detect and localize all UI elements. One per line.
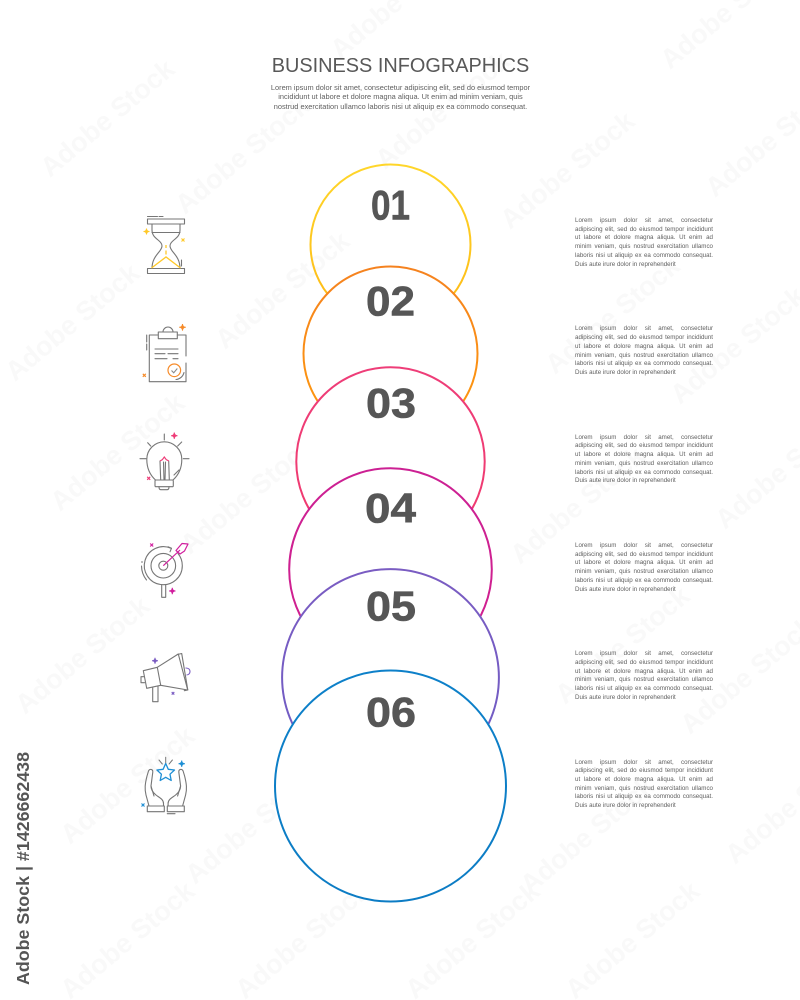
intro text xyxy=(271,83,530,111)
text block 03: minim veniam, quis nostrud exercitation ullamco xyxy=(575,460,713,467)
text block 04: adipiscing elit, sed do eiusmod tempor incididunt xyxy=(575,551,713,558)
icon: clipboard checklist xyxy=(143,324,186,382)
watermark pattern: Adobe Stock xyxy=(55,720,201,850)
intro text: Lorem ipsum dolor sit amet, consectetur adipiscing elit, sed do eiusmod tempor xyxy=(271,83,530,92)
text block 05: minim veniam, quis nostrud exercitation ullamco xyxy=(575,676,713,683)
number 05: 05 xyxy=(366,582,416,630)
watermark pattern: Adobe Stock xyxy=(540,250,686,380)
number 03: 03 xyxy=(366,380,416,426)
intro text: incididunt ut labore et dolore magna aliqua. Ut enim ad minim veniam, quis xyxy=(278,92,523,101)
watermark pattern: Adobe Stock xyxy=(35,53,181,183)
number 04: 04 xyxy=(365,484,417,532)
stock id vertical label: Adobe Stock | #1426662438 xyxy=(13,752,33,985)
watermark pattern: Adobe Stock xyxy=(210,225,356,355)
watermark pattern: Adobe Stock xyxy=(515,770,661,900)
icon: hourglass xyxy=(144,216,184,274)
icon: hands holding star xyxy=(142,757,186,814)
text block 06: Lorem ipsum dolor sit amet, consectetur xyxy=(575,759,713,766)
watermark pattern: Adobe Stock xyxy=(45,387,191,517)
text block 05: adipiscing elit, sed do eiusmod tempor incididunt xyxy=(575,659,713,666)
watermark pattern: Adobe Stock xyxy=(370,45,516,175)
icon: megaphone xyxy=(141,654,190,702)
text block 03: Lorem ipsum dolor sit amet, consectetur xyxy=(575,434,713,441)
circle 01 xyxy=(310,164,470,324)
title: BUSINESS INFOGRAPHICS xyxy=(272,55,529,77)
text block 02: Lorem ipsum dolor sit amet, consectetur xyxy=(575,325,713,332)
circle 03 xyxy=(296,367,485,556)
watermark pattern: Adobe Stock xyxy=(0,257,146,387)
watermark pattern: Adobe Stock xyxy=(10,590,156,720)
text block 01: laboris nisi ut aliquip ex ea commodo consequat. xyxy=(575,252,713,259)
circle 06 xyxy=(275,670,506,902)
intro text: nostrud exercitation ullamco laboris nisi ut aliquip ex ea commodo consequat. xyxy=(274,102,527,111)
text block 02 xyxy=(575,325,713,376)
watermark pattern: Adobe Stock xyxy=(170,90,316,220)
text block 05: laboris nisi ut aliquip ex ea commodo consequat. xyxy=(575,685,713,692)
icon: light bulb xyxy=(140,432,189,490)
text block 03: ut labore et dolore magna aliqua. Ut enim ad xyxy=(575,451,713,458)
text block 02: adipiscing elit, sed do eiusmod tempor incididunt xyxy=(575,334,713,341)
text block 05: Lorem ipsum dolor sit amet, consectetur xyxy=(575,650,713,657)
text block 04: laboris nisi ut aliquip ex ea commodo consequat. xyxy=(575,577,713,584)
text block 03: laboris nisi ut aliquip ex ea commodo consequat. xyxy=(575,468,713,476)
number 02: 02 xyxy=(366,278,415,324)
number 01: 01 xyxy=(371,182,410,228)
text block 06: laboris nisi ut aliquip ex ea commodo consequat. xyxy=(575,793,713,800)
text block 04: minim veniam, quis nostrud exercitation ullamco xyxy=(575,568,713,575)
text block 02: Duis aute irure dolor in reprehenderit xyxy=(575,369,676,376)
watermark pattern: Adobe Stock xyxy=(550,580,696,710)
text block 01 xyxy=(575,217,713,268)
text block 04: ut labore et dolore magna aliqua. Ut enim ad xyxy=(575,559,713,566)
text block 01: Duis aute irure dolor in reprehenderit xyxy=(575,261,676,268)
text block 02: minim veniam, quis nostrud exercitation ullamco xyxy=(575,352,713,358)
watermark pattern: Adobe Stock xyxy=(180,760,326,890)
text block 06: minim veniam, quis nostrud exercitation ullamco xyxy=(575,785,713,792)
watermark pattern: Adobe Stock xyxy=(175,430,321,560)
text block 02: laboris nisi ut aliquip ex ea commodo consequat. xyxy=(575,360,713,367)
text block 03: adipiscing elit, sed do eiusmod tempor incididunt xyxy=(575,442,713,449)
text block 05: ut labore et dolore magna aliqua. Ut enim ad xyxy=(575,668,713,675)
text block 03: Duis aute irure dolor in reprehenderit xyxy=(575,477,676,484)
watermark pattern: Adobe Stock xyxy=(495,105,641,235)
text block 05: Duis aute irure dolor in reprehenderit xyxy=(575,694,676,701)
text block 06: ut labore et dolore magna aliqua. Ut enim ad xyxy=(575,776,713,783)
text block 04: Lorem ipsum dolor sit amet, consectetur xyxy=(575,542,713,549)
text block 04 xyxy=(575,542,713,593)
text block 06: Duis aute irure dolor in reprehenderit xyxy=(575,802,676,809)
text block 01: minim veniam, quis nostrud exercitation ullamco xyxy=(575,243,713,250)
number 06: 06 xyxy=(366,688,416,736)
text block 05 xyxy=(575,650,713,701)
text block 01: ut labore et dolore magna aliqua. Ut enim ad xyxy=(575,234,713,241)
circle 04 xyxy=(289,468,492,671)
text block 02: ut labore et dolore magna aliqua. Ut enim ad xyxy=(575,343,713,350)
text block 06: adipiscing elit, sed do eiusmod tempor incididunt xyxy=(575,767,713,774)
icon: target with arrow xyxy=(142,544,188,597)
circle 02 xyxy=(304,266,478,440)
text block 03 xyxy=(575,434,713,484)
text block 01: Lorem ipsum dolor sit amet, consectetur xyxy=(575,217,713,224)
watermark pattern: Adobe Stock xyxy=(505,440,651,570)
circle 05 xyxy=(282,569,499,786)
text block 01: adipiscing elit, sed do eiusmod tempor incididunt xyxy=(575,226,713,233)
text block 06 xyxy=(575,759,713,809)
text block 04: Duis aute irure dolor in reprehenderit xyxy=(575,586,676,593)
